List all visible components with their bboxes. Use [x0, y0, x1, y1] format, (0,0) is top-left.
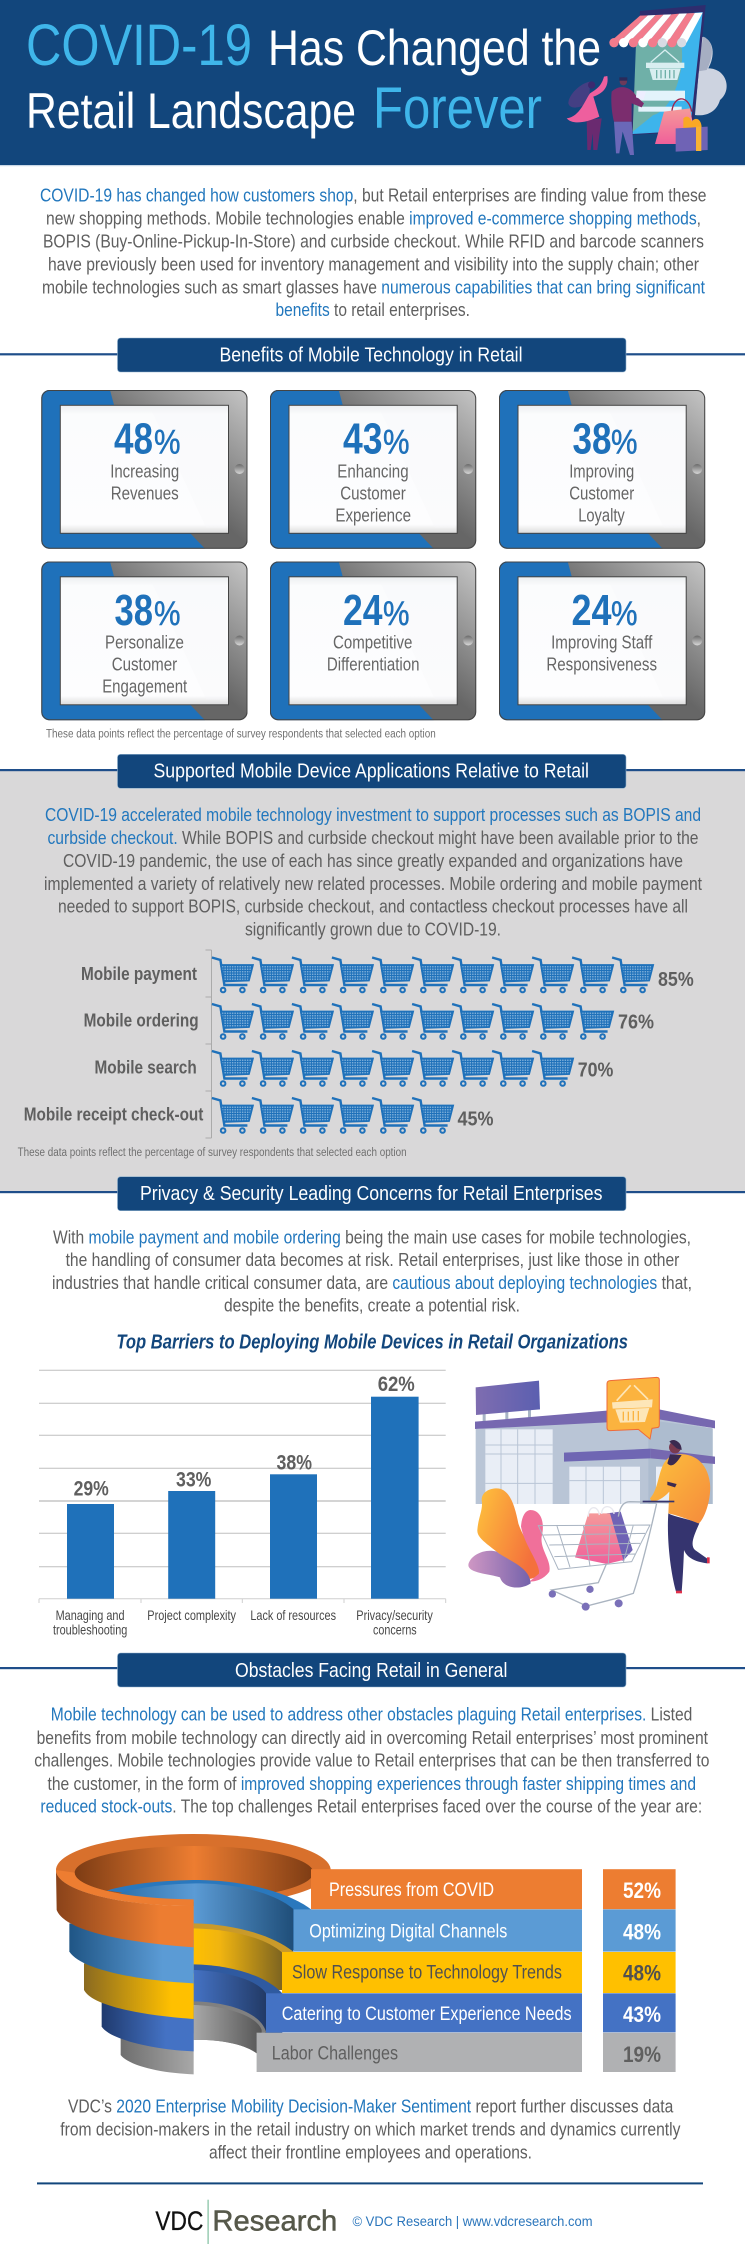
row: pressures from COVID 52%: 52%: [623, 1878, 661, 1903]
row: mobile search 70%: [94, 1051, 614, 1086]
tablet: competitive differentiation 24%: 24: [343, 586, 383, 635]
bar: lack of resources 38%: 38%: [276, 1451, 312, 1474]
row: mobile receipt check-out 45%: 45%: [458, 1109, 494, 1131]
tablet: increasing revenues 48%: Revenues: [111, 482, 179, 503]
title: Has Changed the: [268, 20, 601, 76]
supported applications paragraph: [44, 804, 702, 940]
bar: project complexity 33%: 33%: [176, 1469, 212, 1492]
row: mobile payment 85%: [81, 958, 694, 992]
icon: store with shopper and cart: [468, 1377, 715, 1611]
footnote: applications: These data points reflect the percentage of survey respondents that selected each option: [18, 1147, 407, 1159]
row: slow response to technology trends 48%: [282, 1952, 676, 1993]
section heading: supported applications: [0, 754, 745, 788]
privacy paragraph: despite the benefits, create a potential risk.: [224, 1295, 520, 1316]
logo: VDC Research: VDC: [155, 2206, 203, 2236]
bar: privacy/security concerns 62%: [356, 1373, 433, 1638]
bar: managing and troubleshooting 29%: troubleshooting: [53, 1623, 127, 1638]
speech bubble with basket: [607, 1377, 659, 1439]
intro paragraph: new shopping methods. Mobile technologies enable improved e-commerce shopping methods,: [46, 207, 701, 228]
privacy paragraph: industries that handle critical consumer data, are cautious about deploying technologies that,: [52, 1272, 692, 1293]
tablet: improving staff responsiveness 24%: [499, 562, 705, 720]
row: labor challenges 19%: Labor Challenges: [272, 2043, 398, 2065]
row: labor challenges 19%: 19%: [623, 2042, 661, 2067]
bar: privacy/security concerns 62%: Privacy/security: [356, 1608, 433, 1623]
tablet: increasing revenues 48%: 48: [114, 414, 153, 463]
footer rule: [37, 2182, 703, 2184]
row: mobile search 70%: 70%: [578, 1060, 614, 1082]
row: mobile search 70%: Mobile search: [94, 1057, 197, 1077]
tablet: enhancing customer experience 43%: Experience: [335, 505, 411, 526]
bar: project complexity 33%: Project complexity: [147, 1608, 236, 1623]
chart: shopping cart pictogram: [24, 950, 694, 1138]
tablet: competitive differentiation 24%: [270, 562, 476, 720]
row: slow response to technology trends 48%: Slow Response to Technology Trends: [292, 1962, 562, 1984]
intro paragraph: benefits to retail enterprises.: [276, 299, 470, 320]
section heading: supported applications: Supported Mobile Device Applications Relative to Retail: [154, 759, 589, 782]
tablet: improving customer loyalty 38%: [499, 390, 705, 549]
row: optimizing digital channels 48%: 48%: [623, 1920, 661, 1944]
section heading: benefits: Benefits of Mobile Technology in Retail: [220, 344, 522, 367]
tablet: improving staff responsiveness 24%: Responsiveness: [546, 654, 657, 675]
row: optimizing digital channels 48%: [294, 1909, 676, 1952]
title: [26, 13, 601, 141]
row: pressures from COVID 52%: [311, 1869, 676, 1909]
tablet: increasing revenues 48%: Increasing: [110, 460, 179, 481]
privacy paragraph: [52, 1226, 692, 1316]
tablet: increasing revenues 48%: [41, 390, 247, 549]
tablet: enhancing customer experience 43%: Customer: [340, 482, 406, 503]
supported applications paragraph: significantly grown due to COVID-19.: [245, 919, 501, 940]
tablet: improving customer loyalty 38%: Customer: [569, 482, 634, 503]
bar: managing and troubleshooting 29%: 29%: [74, 1478, 109, 1501]
row: slow response to technology trends 48%: 48%: [623, 1960, 661, 1986]
tablet: competitive differentiation 24%: Competitive: [333, 631, 412, 652]
title: Forever: [373, 76, 542, 141]
tablet: personalize customer engagement 38%: Personalize: [105, 631, 184, 652]
row: mobile payment 85%: 85%: [658, 969, 694, 991]
panel: supported applications background: [0, 770, 745, 1192]
tablet: competitive differentiation 24%: %: [383, 595, 410, 633]
chart: 3D funnel of challenges: [56, 1834, 676, 2074]
bar: managing and troubleshooting 29%: [53, 1478, 127, 1638]
icon: mobile storefront with shoppers: [567, 5, 727, 155]
row: catering to customer experience needs 43%: Catering to Customer Experience Needs: [282, 2003, 572, 2025]
row: mobile receipt check-out 45%: Mobile receipt check-out: [24, 1105, 203, 1125]
tablet: enhancing customer experience 43%: Enhancing: [337, 460, 409, 481]
row: mobile payment 85%: Mobile payment: [81, 964, 197, 984]
tablet: competitive differentiation 24%: Differentiation: [327, 654, 420, 675]
tablet: improving staff responsiveness 24%: 24: [572, 586, 612, 635]
tablet: personalize customer engagement 38%: %: [154, 595, 180, 633]
tablet: enhancing customer experience 43%: 43: [343, 414, 382, 463]
bar: privacy/security concerns 62%: 62%: [378, 1373, 415, 1396]
section heading: obstacles: Obstacles Facing Retail in General: [235, 1659, 507, 1682]
bar: lack of resources 38%: [250, 1451, 336, 1623]
tablet: improving customer loyalty 38%: Improving: [569, 460, 634, 481]
intro paragraph: [40, 185, 706, 320]
logo: VDC Research: [155, 2200, 337, 2244]
section heading: privacy and security: [0, 1177, 745, 1211]
panel: benefit tablets: [41, 390, 705, 720]
footnote: benefits: These data points reflect the percentage of survey respondents that selected each option: [46, 728, 436, 740]
row: mobile receipt check-out 45%: [24, 1098, 494, 1133]
row: mobile ordering 76%: Mobile ordering: [84, 1011, 199, 1031]
intro paragraph: mobile technologies such as smart glasses have numerous capabilities that can bring significant: [42, 276, 705, 297]
tablet: improving customer loyalty 38%: %: [611, 423, 638, 461]
tablet: improving customer loyalty 38%: Loyalty: [578, 505, 625, 526]
bar: lack of resources 38%: Lack of resources: [250, 1608, 336, 1623]
row: labor challenges 19%: [257, 2033, 676, 2072]
section heading: privacy and security: Privacy & Security Leading Concerns for Retail Enterprises: [140, 1182, 602, 1205]
tablet: personalize customer engagement 38%: Customer: [112, 654, 177, 675]
tablet: improving staff responsiveness 24%: %: [611, 595, 638, 633]
tablet: enhancing customer experience 43%: [270, 390, 476, 549]
obstacles paragraph: [34, 1704, 709, 1817]
bar: project complexity 33%: [147, 1469, 236, 1623]
funnel rings: [56, 1834, 331, 2074]
row: pressures from COVID 52%: Pressures from COVID: [329, 1879, 494, 1901]
bar: managing and troubleshooting 29%: Managing and: [56, 1608, 124, 1623]
header banner: [0, 0, 745, 166]
row: optimizing digital channels 48%: Optimizing Digital Channels: [309, 1921, 507, 1943]
bar chart: top barriers: [39, 1370, 446, 1638]
tablet: improving staff responsiveness 24%: Improving Staff: [551, 631, 653, 652]
section heading: obstacles: [0, 1653, 745, 1687]
tablet: improving customer loyalty 38%: 38: [572, 414, 612, 463]
title: COVID-19: [26, 13, 252, 78]
tablet: personalize customer engagement 38%: Engagement: [102, 676, 187, 697]
closing paragraph: VDC’s 2020 Enterprise Mobility Decision-Maker Sentiment report further discusses data: [68, 2096, 674, 2117]
tablet: enhancing customer experience 43%: %: [383, 423, 410, 461]
closing paragraph: affect their frontline employees and operations.: [209, 2141, 532, 2162]
title: Retail Landscape: [26, 83, 356, 139]
privacy paragraph: With mobile payment and mobile ordering being the main use cases for mobile technologies,: [53, 1226, 691, 1247]
row: mobile ordering 76%: [84, 1004, 654, 1039]
row: mobile ordering 76%: 76%: [618, 1012, 654, 1034]
row: catering to customer experience needs 43%: 43%: [623, 2002, 661, 2027]
obstacles paragraph: Mobile technology can be used to address other obstacles plaguing Retail enterprises. Listed: [51, 1704, 692, 1725]
tablet: personalize customer engagement 38%: 38: [114, 586, 153, 635]
section heading: benefits: [0, 338, 745, 372]
bar: privacy/security concerns 62%: concerns: [373, 1623, 417, 1638]
tablet: increasing revenues 48%: %: [154, 423, 180, 461]
footer copyright and website: © VDC Research | www.vdcresearch.com: [352, 2213, 592, 2229]
tablet: personalize customer engagement 38%: [41, 562, 247, 720]
chart title: Top Barriers to Deploying Mobile Devices in Retail Organizations: [116, 1330, 628, 1353]
closing paragraph: [60, 2096, 681, 2162]
logo: VDC Research: Research: [212, 2206, 337, 2238]
row: catering to customer experience needs 43%: [266, 1993, 676, 2032]
